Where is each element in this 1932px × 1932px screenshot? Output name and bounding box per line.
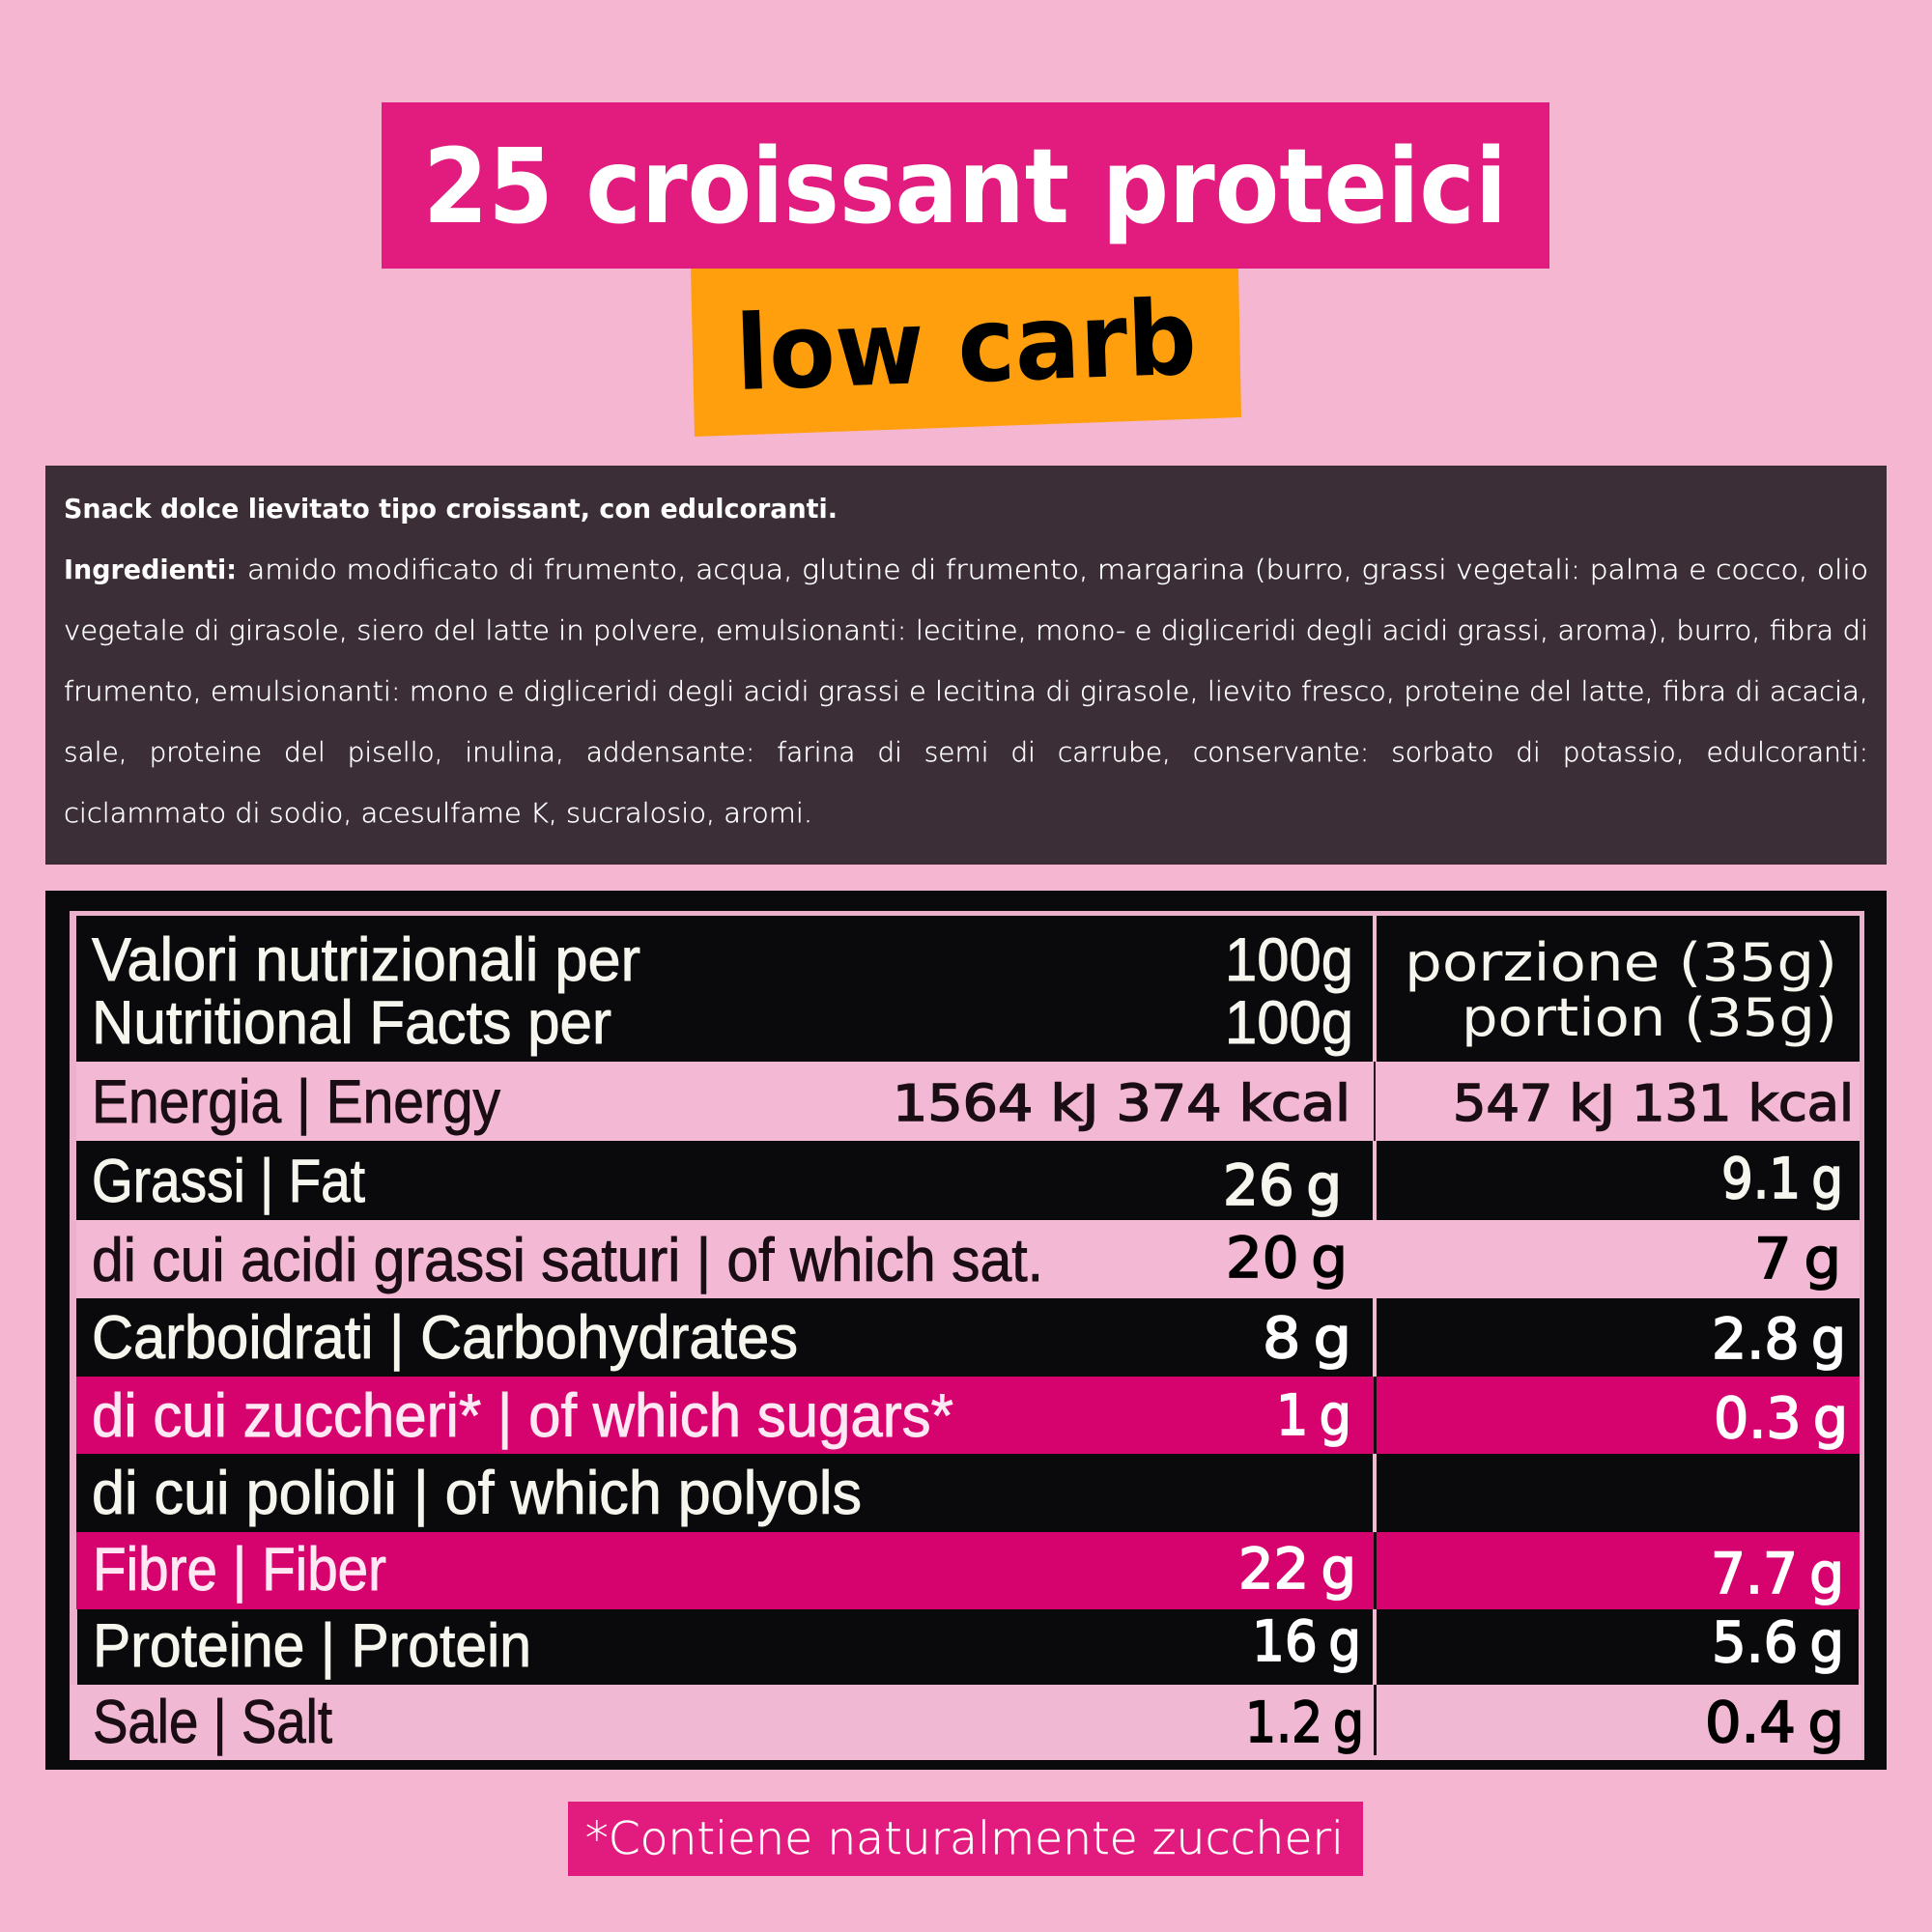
row: fat [76,1141,1860,1220]
row: energy: 1564 kJ 374 kcal [893,1075,1350,1133]
subtitle tag: low carb: low carb [734,278,1199,414]
row: carbohydrates: 8 g [1263,1305,1351,1371]
row: fat: 9.1 g [1721,1146,1843,1211]
row: saturated fat: di cui acidi grassi saturi | of which sat. [92,1227,1043,1294]
ingredients text: sale, proteine del pisello, inulina, addensante: farina di semi di carrube, conservante: sorbato di potassio, edulcoranti: [64,736,1868,768]
table header row: 100g [1225,926,1353,994]
row: energy: Energia | Energy [92,1068,500,1136]
product description: Snack dolce lievitato tipo croissant, con edulcoranti. [64,493,838,525]
row: polyols: di cui polioli | of which polyols [92,1460,862,1527]
row: salt [71,1685,1861,1760]
row: protein: Proteine | Protein [93,1612,531,1680]
ingredients text: Ingredienti: [64,554,237,585]
row: fat: 26 g [1223,1152,1342,1218]
row: fiber: 22 g [1238,1536,1356,1602]
row: protein: 16 g [1252,1608,1361,1674]
row: salt: Sale | Salt [93,1689,332,1756]
row: salt: 0.4 g [1705,1690,1844,1755]
table header row: porzione (35g) [1405,932,1837,993]
ingredients text: ciclammato di sodio, acesulfame K, sucralosio, aromi. [64,797,812,829]
row: sugars: 1 g [1276,1382,1351,1448]
row: fiber: 7.7 g [1711,1541,1844,1606]
title: 25 croissant proteici: 25 croissant proteici [423,128,1507,247]
ingredients text [64,554,1868,829]
table header row: portion (35g) [1462,987,1837,1048]
ingredients text: frumento, emulsionanti: mono e digliceridi degli acidi grassi e lecitina di girasole, lievito fresco, proteine del latte, fibra di acacia, [64,675,1868,707]
table header row: 100g [1225,989,1353,1057]
footnote: *Contiene naturalmente zuccheri [585,1812,1344,1864]
ingredients text: amido modificato di frumento, acqua, glutine di frumento, margarina (burro, grassi vegetali: palma e cocco, olio [247,554,1868,585]
panel: ingredients [45,466,1887,865]
row: sugars: 0.3 g [1714,1385,1848,1451]
row: energy: 547 kJ 131 kcal [1453,1075,1854,1133]
row: carbohydrates [76,1298,1860,1377]
row: fiber [76,1532,1860,1609]
row: carbohydrates: Carboidrati | Carbohydrates [92,1304,798,1372]
row: saturated fat [76,1220,1860,1298]
row: polyols [76,1454,1860,1532]
row: carbohydrates: 2.8 g [1712,1306,1846,1372]
table header row: Nutritional Facts per [92,989,611,1057]
row: fat: Grassi | Fat [92,1148,365,1215]
row: salt: 1.2 g [1245,1690,1364,1755]
row: protein: 5.6 g [1712,1609,1844,1675]
row: sugars [76,1377,1860,1454]
row: energy [76,1062,1860,1141]
title: 25 croissant proteici [382,102,1549,269]
panel: nutrition table [45,891,1887,1770]
footnote [568,1802,1363,1876]
table header row: Valori nutrizionali per [92,926,640,994]
row: sugars: di cui zuccheri* | of which sugars* [92,1382,953,1450]
row: protein [77,1608,1859,1685]
row: saturated fat: 7 g [1754,1226,1841,1292]
row: fiber: Fibre | Fiber [93,1536,386,1604]
row: saturated fat: 20 g [1226,1225,1348,1291]
table header row [76,916,1860,1062]
ingredients text: vegetale di girasole, siero del latte in polvere, emulsionanti: lecitine, mono- e digliceridi degli acidi grassi, aroma), burro, fibra di [64,614,1868,646]
column divider [1373,916,1377,1755]
